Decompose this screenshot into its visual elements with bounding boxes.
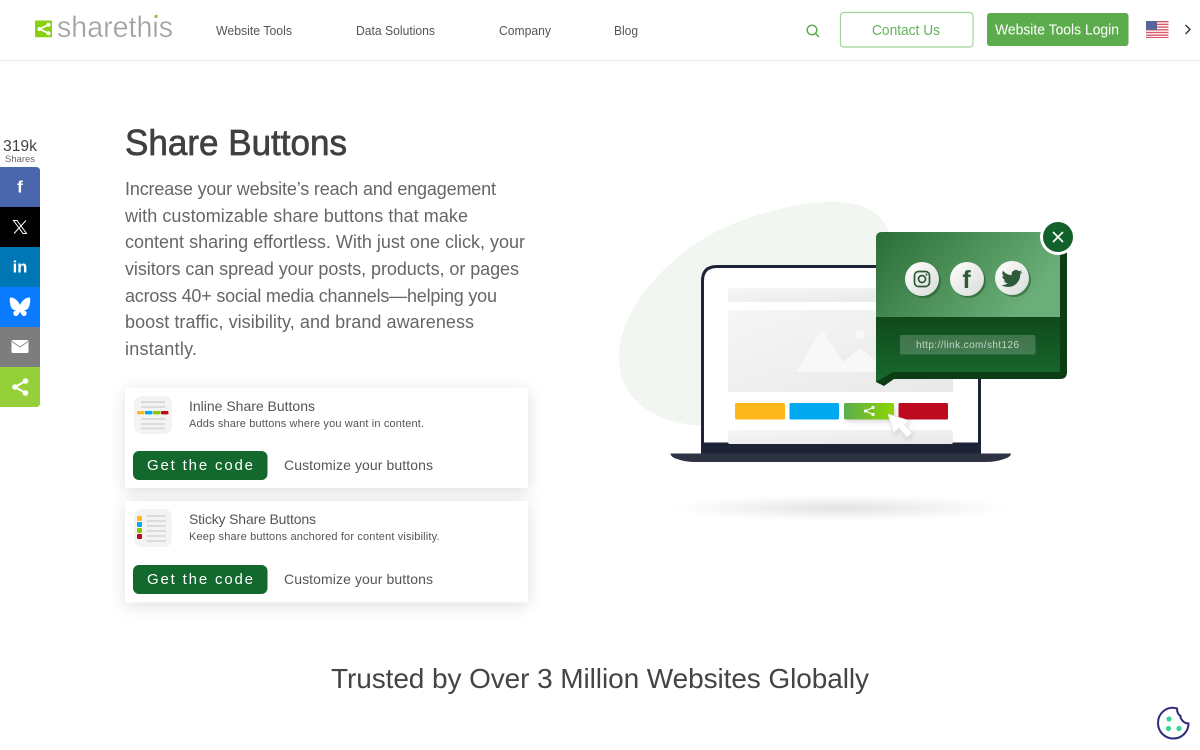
title: Share Buttons — [125, 122, 347, 163]
customize link: Customize your buttons — [284, 457, 433, 473]
facebook button: f — [17, 178, 23, 196]
navigation links: Company — [499, 23, 551, 38]
sharethis button — [0, 367, 40, 407]
get the code button — [133, 565, 268, 594]
description paragraph: boost traffic, visibility, and brand awareness — [125, 312, 474, 332]
url field — [900, 335, 1036, 354]
section heading: trusted: Trusted by Over 3 Million Websites Globally — [331, 663, 869, 694]
share count — [3, 138, 37, 165]
panel: inline share buttons — [125, 388, 528, 488]
website tools login button: Website Tools Login — [995, 22, 1119, 38]
icon: search — [807, 25, 819, 37]
description paragraph: Increase your website’s reach and engagement — [125, 179, 496, 199]
background blob — [619, 202, 890, 425]
icon: twitter — [995, 261, 1031, 297]
navigation links: Blog — [614, 23, 638, 38]
icon: facebook — [950, 262, 986, 298]
navigation links — [216, 23, 638, 38]
icon: instagram — [905, 262, 941, 298]
ground shadow — [668, 495, 1012, 521]
share count: 319k — [3, 138, 37, 155]
url field: http://link.com/sht126 — [916, 340, 1019, 351]
illustration: laptop with share popup — [619, 202, 1076, 521]
get the code button — [133, 451, 268, 480]
card description: Keep share buttons anchored for content visibility. — [189, 531, 440, 543]
bluesky button — [0, 287, 40, 327]
icon: us flag — [1146, 21, 1168, 38]
logo: sharethis — [57, 11, 173, 44]
description paragraph: with customizable share buttons that make — [124, 206, 468, 226]
description paragraph: content sharing effortless. With just one click, your — [125, 232, 525, 252]
cursor — [888, 414, 912, 438]
share count: Shares — [5, 154, 35, 165]
description paragraph — [124, 179, 525, 359]
email button — [0, 327, 40, 367]
contact us button — [840, 12, 973, 47]
get the code button: Get the code — [147, 457, 253, 474]
description paragraph: instantly. — [125, 339, 197, 359]
screen placeholders — [728, 288, 953, 302]
navigation links: Data Solutions — [356, 23, 435, 38]
panel: sticky share buttons — [125, 501, 528, 602]
x button — [0, 207, 40, 247]
header bar — [0, 0, 1200, 61]
description paragraph: visitors can spread your posts, products, or pages — [125, 259, 519, 279]
close button — [1040, 219, 1076, 255]
facebook button — [0, 167, 40, 207]
share sidebar — [0, 138, 40, 407]
icon: inline buttons — [134, 396, 172, 434]
website tools login button — [987, 13, 1128, 46]
icon: cookie — [1158, 708, 1188, 738]
laptop — [670, 266, 1011, 462]
card heading: Sticky Share Buttons — [189, 511, 316, 527]
linkedin button — [0, 247, 40, 287]
card description: Adds share buttons where you want in content. — [189, 418, 424, 430]
icon: facebook: f — [962, 266, 971, 294]
description paragraph: across 40+ social media channels—helping you — [125, 286, 497, 306]
card heading: Inline Share Buttons — [189, 398, 315, 414]
share button row — [735, 403, 948, 422]
customize link: Customize your buttons — [284, 571, 433, 587]
get the code button: Get the code — [147, 571, 253, 588]
contact us button: Contact Us — [872, 23, 940, 39]
icon: sticky buttons — [134, 509, 172, 547]
navigation links: Website Tools — [216, 23, 292, 38]
share popup — [876, 219, 1076, 386]
linkedin button: in — [13, 258, 27, 276]
icon: chevron — [1186, 25, 1190, 34]
